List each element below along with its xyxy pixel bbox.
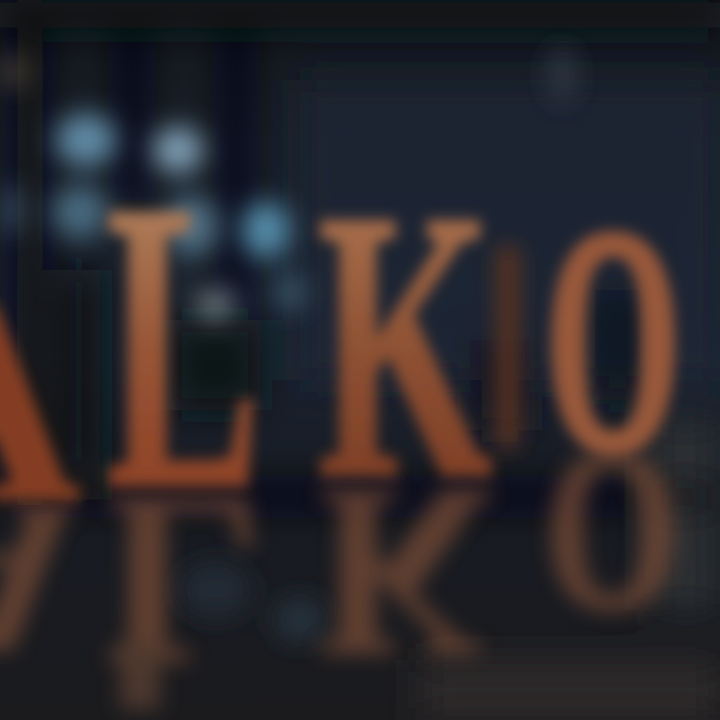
letter K: K bbox=[318, 132, 493, 557]
reflected K: K bbox=[318, 435, 492, 710]
letter L: L bbox=[106, 118, 261, 574]
reflected O: O bbox=[545, 405, 679, 660]
shadowed letter between K and O bbox=[496, 245, 520, 450]
reflected L: L bbox=[106, 444, 261, 719]
reflected L stem bbox=[120, 640, 160, 710]
letters: A L K O bbox=[0, 201, 684, 510]
lights: blue bokeh blobs bbox=[2, 47, 574, 642]
reflection: mirrored letters on floor bbox=[0, 448, 684, 718]
letter O: O bbox=[546, 163, 680, 518]
